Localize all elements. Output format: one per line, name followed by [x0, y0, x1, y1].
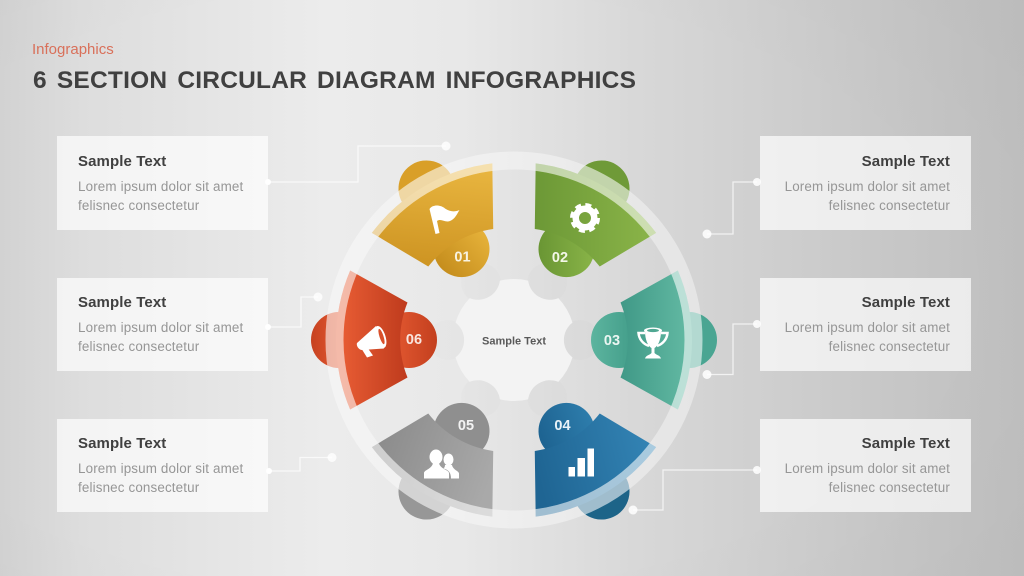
icon: people [424, 450, 459, 478]
section 04: blue [534, 402, 656, 520]
icon: bar chart [568, 448, 594, 476]
text card 4: Sample Text [862, 435, 950, 452]
text card 3: felisnec consectetur [829, 339, 950, 354]
connector: card 4 to section 04 [628, 466, 761, 514]
connector: card 2 to section 02 [702, 178, 761, 238]
section 01: orange [372, 160, 494, 278]
number 03: 03 [604, 333, 620, 349]
number 05: 05 [458, 418, 474, 434]
number 04: 04 [554, 418, 571, 434]
center gear [428, 263, 600, 417]
connector: card 6 to section 06 [265, 292, 322, 330]
section 06: red [311, 270, 437, 410]
icon: flag [430, 206, 460, 234]
text card 4 [760, 419, 971, 512]
connector: card 3 to section 03 [702, 320, 761, 379]
center label: Sample Text [482, 336, 546, 348]
number 01: 01 [454, 250, 471, 266]
icon: trophy [638, 328, 668, 358]
text card 5 [57, 419, 268, 512]
connector: card 5 to section 05 [266, 453, 336, 474]
text card 5: Sample Text [78, 435, 166, 452]
title: 6 SECTION CIRCULAR DIAGRAM INFOGRAPHICS [33, 67, 636, 94]
section 02: green [534, 160, 656, 278]
text card 5: Lorem ipsum dolor sit amet [78, 461, 243, 476]
text card 2 [760, 136, 971, 230]
outer translucent ring [334, 160, 694, 520]
number 02: 02 [552, 250, 568, 266]
subtitle: Infographics: Infographics [32, 41, 114, 58]
connector: card 1 to section 01 [265, 142, 450, 185]
section 05: gray [372, 402, 494, 520]
icon: gear [572, 205, 598, 231]
text card 6 [57, 278, 268, 371]
text card 3 [760, 278, 971, 371]
text card 6: Sample Text [78, 294, 166, 311]
number 06: 06 [406, 332, 422, 348]
text card 6: Lorem ipsum dolor sit amet [78, 320, 243, 335]
text card 4: felisnec consectetur [829, 480, 950, 495]
text card 2: felisnec consectetur [829, 198, 950, 213]
text card 1: Lorem ipsum dolor sit amet [78, 179, 243, 194]
icon: megaphone [357, 325, 389, 358]
text card 1: felisnec consectetur [78, 198, 199, 213]
section 03: teal [591, 270, 717, 410]
text card 2: Lorem ipsum dolor sit amet [785, 179, 950, 194]
text card 1: Sample Text [78, 153, 166, 170]
circular diagram [268, 142, 761, 528]
text card 3: Sample Text [862, 294, 950, 311]
text card 5: felisnec consectetur [78, 480, 199, 495]
text card 4: Lorem ipsum dolor sit amet [785, 461, 950, 476]
text card 6: felisnec consectetur [78, 339, 199, 354]
text card 2: Sample Text [862, 153, 950, 170]
text card 1 [57, 136, 268, 230]
text card 3: Lorem ipsum dolor sit amet [785, 320, 950, 335]
